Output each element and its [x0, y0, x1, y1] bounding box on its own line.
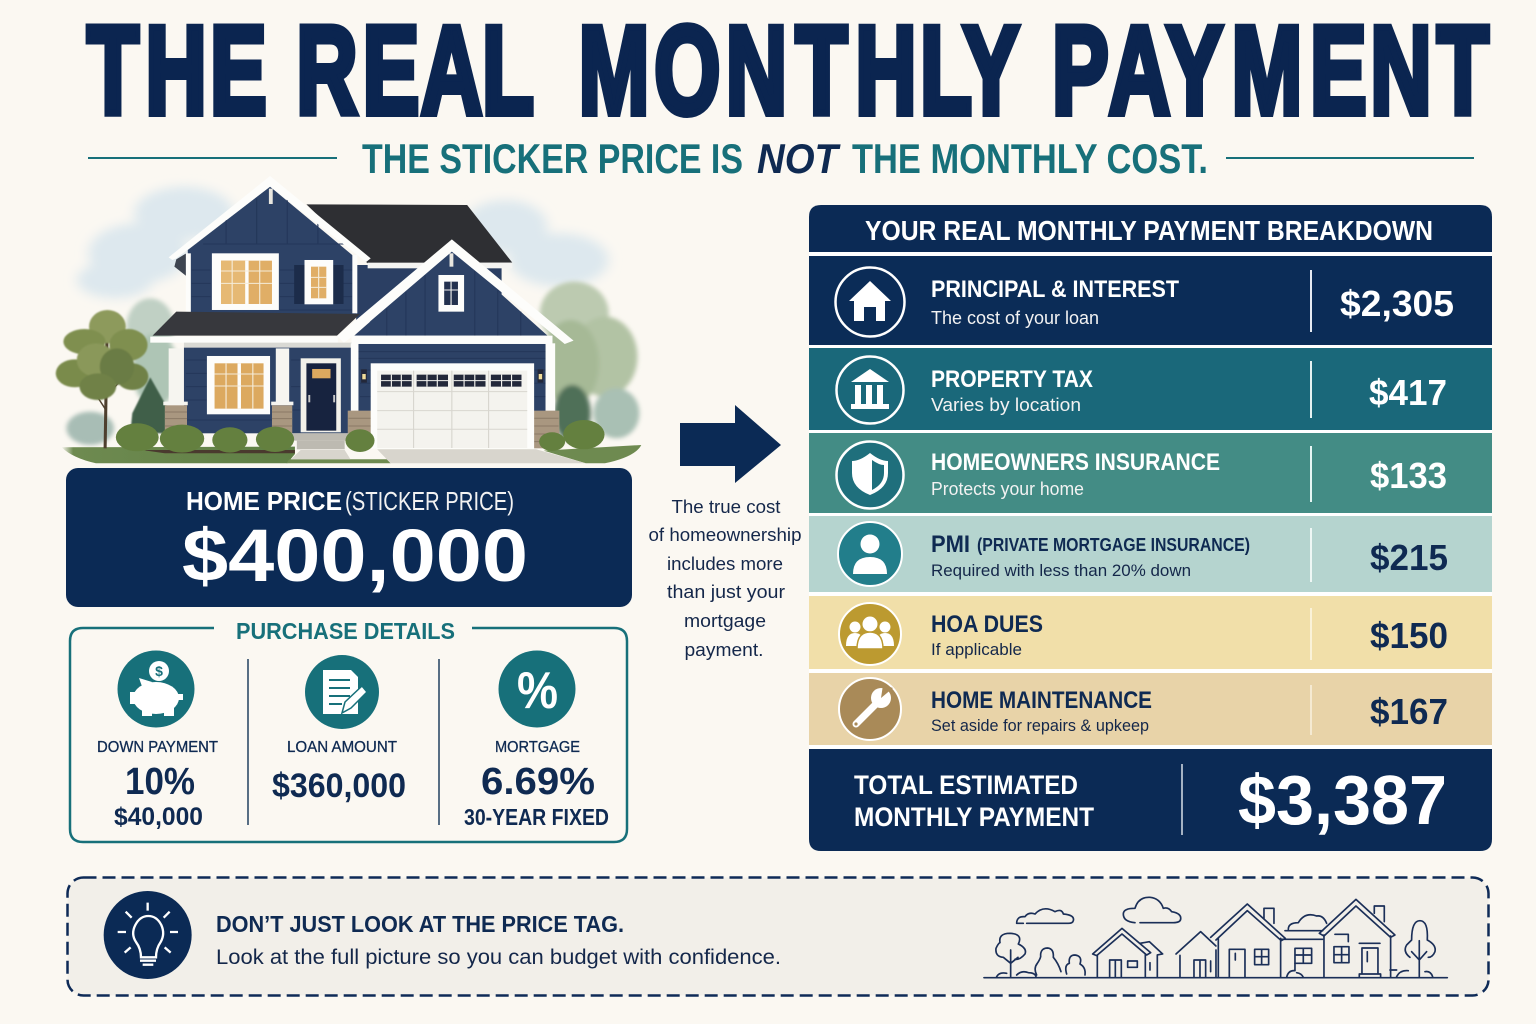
driveway and walk	[291, 449, 586, 463]
row: home maintenance: Set aside for repairs & upkeep	[931, 716, 1149, 735]
icon: percent	[498, 650, 576, 728]
porch fascia	[150, 337, 338, 343]
icon: light bulb	[104, 891, 192, 979]
row: hoa dues: HOA DUES	[931, 611, 1043, 638]
explanatory text: mortgage	[684, 611, 766, 631]
upper left window	[212, 253, 279, 310]
home price panel: (STICKER PRICE)	[345, 486, 514, 516]
sky clouds	[77, 187, 609, 298]
mortgage text: MORTGAGE	[495, 739, 580, 756]
garage gable trim	[337, 239, 574, 344]
total row: TOTAL ESTIMATED	[854, 770, 1078, 800]
mortgage text	[464, 739, 609, 830]
row: private mortgage insurance: Required with less than 20% down	[931, 561, 1191, 580]
arrow	[680, 405, 781, 483]
garage wall	[358, 344, 546, 444]
row: private mortgage insurance: $215	[1370, 537, 1448, 578]
row: home maintenance: $167	[1370, 691, 1448, 732]
shrubs	[116, 420, 605, 453]
icon: shield	[836, 442, 904, 508]
icon: bank	[836, 356, 904, 424]
neighborhood line illustration	[984, 897, 1447, 978]
down payment text	[97, 739, 219, 831]
house illustration	[56, 176, 641, 463]
icon: wrench	[839, 678, 901, 740]
home price panel	[66, 468, 632, 607]
lower wall	[184, 348, 352, 433]
garage door	[371, 363, 534, 449]
steps	[292, 433, 349, 449]
down payment text: DOWN PAYMENT	[97, 739, 219, 756]
total row	[809, 749, 1492, 851]
loan amount text: LOAN AMOUNT	[287, 739, 398, 756]
row: hoa dues: If applicable	[931, 640, 1022, 659]
panel: bottom tip	[68, 878, 1488, 996]
row: principal and interest: $2,305	[1340, 283, 1454, 324]
upper right wall	[356, 265, 502, 322]
row: property tax: PROPERTY TAX	[931, 366, 1093, 393]
row: private mortgage insurance	[809, 516, 1492, 592]
row: hoa dues	[809, 596, 1492, 669]
icon: percent: %	[517, 662, 558, 720]
panel: monthly payment breakdown	[809, 205, 1492, 851]
row: hoa dues: $150	[1370, 615, 1448, 656]
home price value: $400,000	[182, 514, 528, 597]
gable trim	[169, 176, 371, 262]
soffit	[174, 253, 186, 276]
gable vent window	[438, 275, 464, 312]
row: property tax: $417	[1369, 372, 1447, 413]
explanatory text	[648, 497, 802, 660]
row: homeowners insurance: Protects your home	[931, 479, 1084, 499]
tip text: Look at the full picture so you can budget with confidence.	[216, 945, 781, 969]
total row: MONTHLY PAYMENT	[854, 802, 1094, 832]
garage stone	[348, 411, 559, 448]
icon: house	[836, 268, 904, 336]
row: private mortgage insurance: PMI	[931, 531, 970, 558]
porch columns	[163, 348, 293, 433]
breakdown header: YOUR REAL MONTHLY PAYMENT BREAKDOWN	[865, 215, 1433, 246]
explanatory text: of homeownership	[648, 525, 802, 545]
purchase details heading: PURCHASE DETAILS	[236, 618, 455, 644]
breakdown header	[809, 205, 1492, 252]
icon: piggy bank: $	[155, 663, 163, 679]
icon: person	[838, 522, 902, 586]
row: homeowners insurance	[809, 433, 1492, 513]
icon: group	[839, 603, 901, 665]
row: property tax	[809, 348, 1492, 430]
icon: piggy bank	[118, 650, 194, 728]
porch roof	[153, 312, 360, 336]
tip heading: DON’T JUST LOOK AT THE PRICE TAG.	[216, 911, 624, 937]
subtitle: THE MONTHLY COST.	[852, 135, 1208, 182]
row: homeowners insurance: $133	[1370, 455, 1447, 496]
explanatory text: payment.	[684, 640, 764, 660]
row: home maintenance: HOME MAINTENANCE	[931, 687, 1152, 714]
row: principal and interest: PRINCIPAL & INTEREST	[931, 276, 1179, 303]
subtitle	[88, 135, 1474, 182]
loan amount text	[272, 739, 406, 805]
lamps	[361, 369, 543, 383]
mortgage text: 30-YEAR FIXED	[464, 804, 609, 830]
title: THE REAL MONTHLY PAYMENT	[87, 0, 1489, 140]
lower window	[207, 356, 270, 414]
home price label: HOME PRICE	[186, 486, 342, 516]
upper small window with shutters	[294, 260, 344, 304]
loan amount text: $360,000	[272, 767, 406, 805]
subtitle: THE STICKER PRICE IS	[362, 135, 743, 182]
row: home maintenance	[809, 673, 1492, 745]
subtitle: NOT	[757, 135, 841, 182]
back roof	[306, 204, 512, 263]
conifer	[130, 377, 169, 433]
garage gable wall	[354, 250, 548, 336]
row: private mortgage insurance: (PRIVATE MORTGAGE INSURANCE)	[977, 535, 1250, 555]
front tree	[56, 310, 148, 448]
panel: purchase details	[70, 618, 627, 842]
explanatory text: than just your	[667, 582, 785, 602]
row: property tax: Varies by location	[931, 395, 1081, 415]
main gable wall	[188, 187, 356, 317]
lawn	[61, 445, 641, 463]
total row: $3,387	[1238, 761, 1447, 839]
down payment text: $40,000	[114, 803, 203, 831]
front door	[301, 358, 341, 432]
mortgage text: 6.69%	[481, 761, 595, 803]
down payment text: 10%	[125, 761, 195, 803]
background trees	[66, 282, 639, 445]
explanatory text: includes more	[667, 554, 783, 574]
icon: loan document	[305, 655, 379, 729]
row: principal and interest	[809, 256, 1492, 345]
row: principal and interest: The cost of your loan	[931, 308, 1099, 328]
explanatory text: The true cost	[672, 497, 780, 517]
gable siding	[192, 198, 352, 310]
row: homeowners insurance: HOMEOWNERS INSURANCE	[931, 449, 1220, 476]
